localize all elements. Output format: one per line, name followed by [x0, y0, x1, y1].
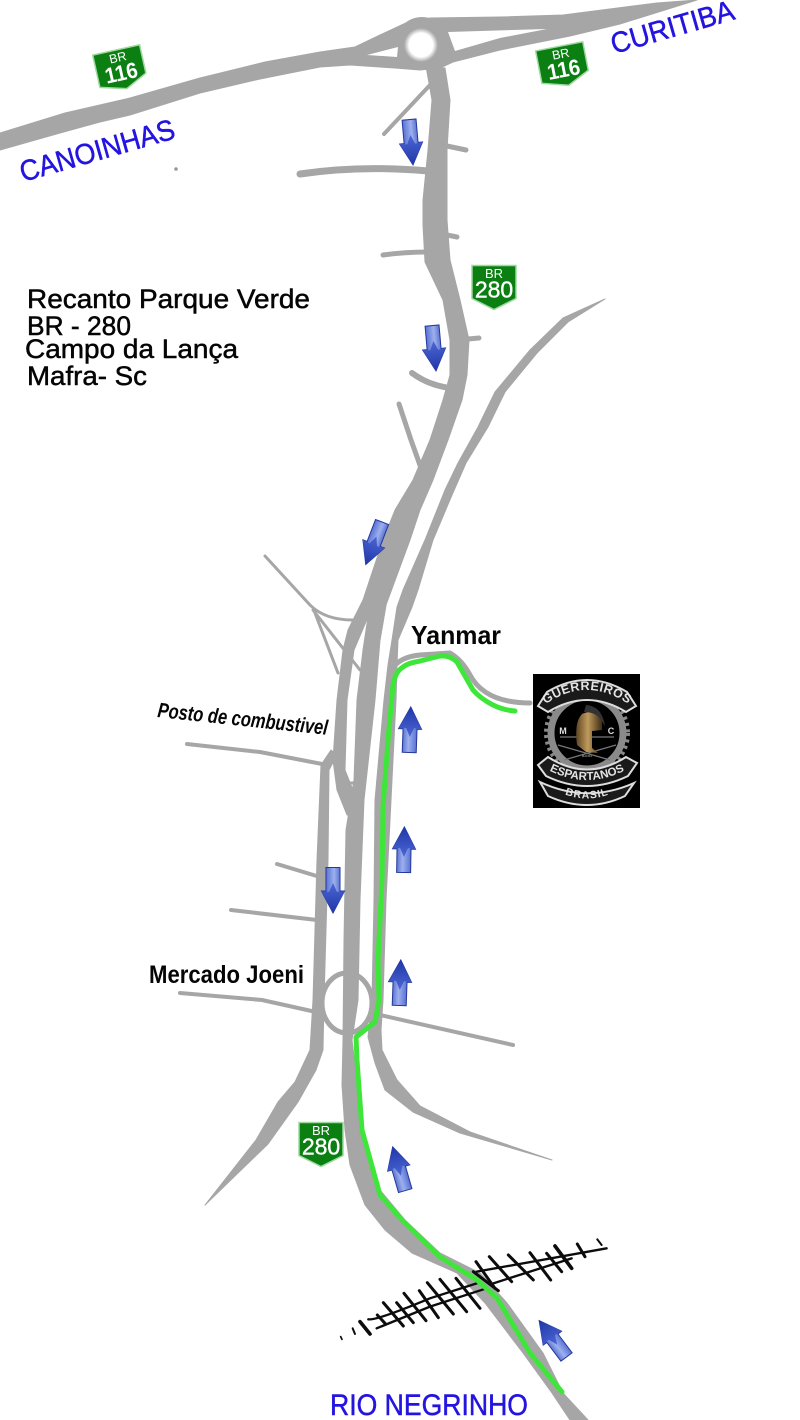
arrow south 1 — [398, 119, 424, 166]
arrow north 2 — [392, 827, 416, 873]
helmet — [576, 712, 602, 753]
railway — [341, 1239, 607, 1339]
sign: BR 116 east: BR — [551, 46, 571, 63]
sign: BR 280 south: BR — [312, 1123, 330, 1138]
sign: BR 280 south — [299, 1122, 343, 1166]
sign: BR 116 east: 116 — [545, 54, 582, 85]
C letter: C — [608, 726, 615, 736]
address line 2: BR - 280 — [27, 311, 131, 341]
arrow north 3 — [388, 960, 412, 1006]
sign: BR 280 north: BR — [485, 266, 503, 281]
sign: BR 280 north — [472, 266, 516, 310]
gear ring — [551, 697, 623, 769]
roundabout centre — [404, 28, 438, 62]
label: Posto de combustivel: Posto de combustivel — [156, 699, 330, 740]
top banner: GUERREIROS — [542, 681, 632, 703]
left branch of fork — [333, 610, 368, 815]
address line 1: Recanto Parque Verde — [27, 284, 310, 314]
BR-280 main road north — [358, 66, 469, 640]
address block — [25, 284, 310, 391]
sign: BR 116 west: 116 — [102, 57, 140, 89]
label: Yanmar: Yanmar — [411, 620, 501, 650]
sign: BR 116 east — [536, 42, 590, 90]
sign: BR 280 south: 280 — [302, 1134, 340, 1160]
lower banner: ESPARTANOS — [550, 764, 624, 780]
label: CANOINHAS: CANOINHAS — [16, 114, 179, 189]
sign: BR 116 west: BR — [108, 49, 128, 66]
green route — [356, 656, 562, 1392]
small text: MAFRA — [582, 754, 592, 758]
outer left road — [205, 750, 337, 1205]
arrow south 4 — [322, 868, 344, 913]
roundabout at BR-116 — [396, 17, 448, 67]
arrow north 1 — [398, 707, 422, 753]
bottom banner: BRASIL — [566, 788, 608, 798]
label: Mercado Joeni: Mercado Joeni — [149, 961, 304, 989]
triangle gap west of junction — [367, 47, 398, 57]
arrow south 2 — [421, 325, 447, 372]
arrow north 4 — [382, 1144, 416, 1194]
arrow north 5 — [530, 1314, 576, 1364]
sign: BR 280 north: 280 — [475, 276, 513, 302]
sign: BR 116 west — [93, 45, 148, 94]
side roads — [180, 84, 530, 1045]
centre road — [342, 605, 588, 1420]
arrow south 3 — [355, 518, 393, 569]
direction arrows — [322, 119, 576, 1364]
address line 3: Campo da Lança — [25, 334, 239, 364]
logo: Guerreiros Espartanos — [533, 674, 640, 808]
BR-116 highway — [0, 0, 697, 150]
small dot — [174, 167, 178, 171]
outer right road — [368, 299, 605, 1160]
triangle gap at junction — [448, 29, 547, 51]
crossed lines — [558, 737, 616, 760]
M letter: M — [559, 726, 567, 736]
address line 4: Mafra- Sc — [27, 361, 147, 391]
